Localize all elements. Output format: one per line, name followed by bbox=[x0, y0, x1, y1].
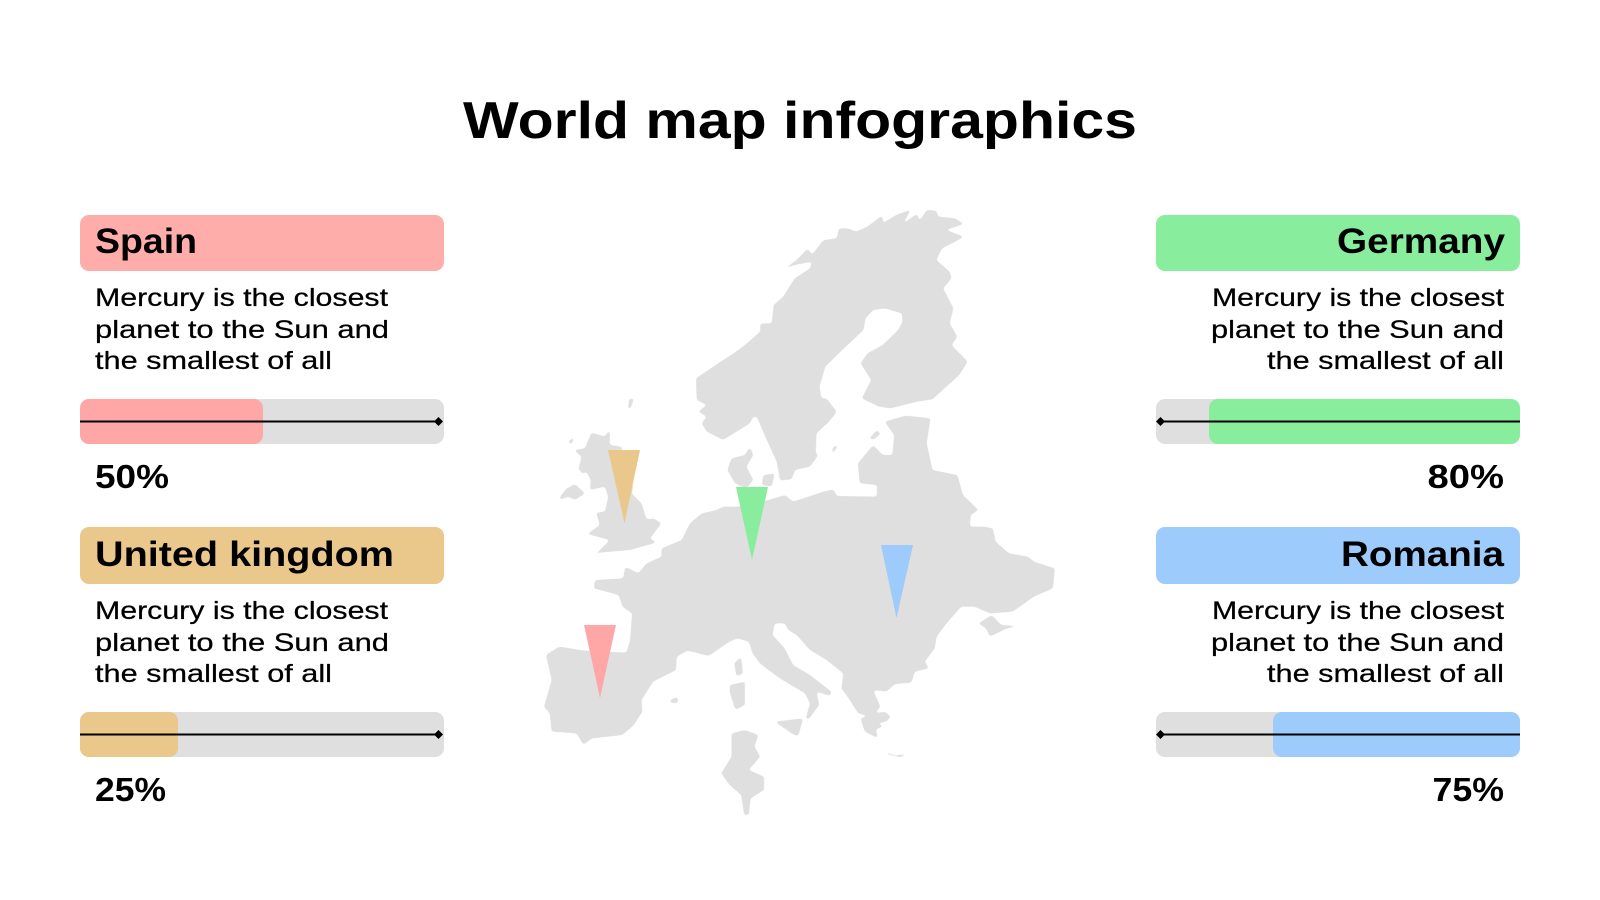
United Kingdom header bbox=[80, 527, 444, 584]
map: Ireland bbox=[560, 484, 585, 500]
map: Baltic islands bbox=[831, 425, 881, 457]
Romania percentage: 75% bbox=[1432, 771, 1504, 808]
Germany description: planet to the Sun and bbox=[1211, 316, 1504, 344]
United Kingdom progress bar bbox=[80, 712, 444, 757]
panel: United Kingdom bbox=[80, 527, 444, 808]
Spain description: Mercury is the closest bbox=[95, 284, 388, 312]
Romania header bbox=[1156, 527, 1520, 584]
United Kingdom description: planet to the Sun and bbox=[95, 629, 389, 657]
Romania description: the smallest of all bbox=[1267, 660, 1504, 688]
Romania description bbox=[1211, 597, 1504, 688]
map: Scandinavia bbox=[696, 209, 968, 481]
Spain description bbox=[95, 284, 389, 375]
Romania header: Romania bbox=[1341, 535, 1505, 574]
Germany percentage: 80% bbox=[1428, 458, 1504, 495]
United Kingdom description bbox=[95, 597, 389, 688]
Spain description: the smallest of all bbox=[95, 347, 332, 375]
United Kingdom description: Mercury is the closest bbox=[95, 597, 388, 625]
Germany description: the smallest of all bbox=[1267, 347, 1504, 375]
Spain description: planet to the Sun and bbox=[95, 316, 389, 344]
marker: Romania bbox=[881, 545, 913, 618]
map: Great Britain bbox=[574, 428, 661, 561]
Spain progress bar bbox=[80, 399, 444, 444]
map: continental Europe bbox=[544, 416, 1055, 745]
map: Balearic islands bbox=[670, 697, 678, 703]
Germany progress bar bbox=[1156, 399, 1520, 444]
panel: Romania bbox=[1156, 527, 1520, 808]
United Kingdom description: the smallest of all bbox=[95, 660, 332, 688]
Spain percentage: 50% bbox=[95, 458, 169, 495]
map: Sicily bbox=[775, 718, 803, 737]
map: northern islets bbox=[568, 398, 634, 445]
Romania description: planet to the Sun and bbox=[1211, 629, 1504, 657]
map of Europe bbox=[544, 209, 1055, 815]
map: Denmark bbox=[727, 447, 753, 488]
Germany header: Germany bbox=[1337, 222, 1506, 261]
Germany header bbox=[1156, 215, 1520, 271]
map: Danish islands bbox=[762, 473, 775, 487]
marker: Germany bbox=[736, 487, 768, 560]
Romania description: Mercury is the closest bbox=[1212, 597, 1504, 625]
Spain header bbox=[80, 215, 444, 271]
Germany description: Mercury is the closest bbox=[1212, 284, 1504, 312]
United Kingdom header: United kingdom bbox=[95, 535, 394, 574]
marker: Spain bbox=[584, 625, 616, 698]
map: Crimea bbox=[978, 615, 1020, 637]
panel: Spain bbox=[80, 215, 444, 495]
title: World map infographics bbox=[463, 92, 1137, 150]
map: Sardinia bbox=[730, 682, 745, 710]
Spain header: Spain bbox=[95, 222, 197, 261]
Germany description bbox=[1211, 284, 1504, 375]
United Kingdom percentage: 25% bbox=[95, 771, 166, 808]
map: Crete bbox=[883, 752, 911, 757]
Romania progress bar bbox=[1156, 712, 1520, 757]
map: Corsica bbox=[734, 657, 743, 677]
map: Tunisia bbox=[721, 730, 764, 815]
panel: Germany bbox=[1156, 215, 1520, 495]
marker: United Kingdom bbox=[608, 450, 640, 523]
